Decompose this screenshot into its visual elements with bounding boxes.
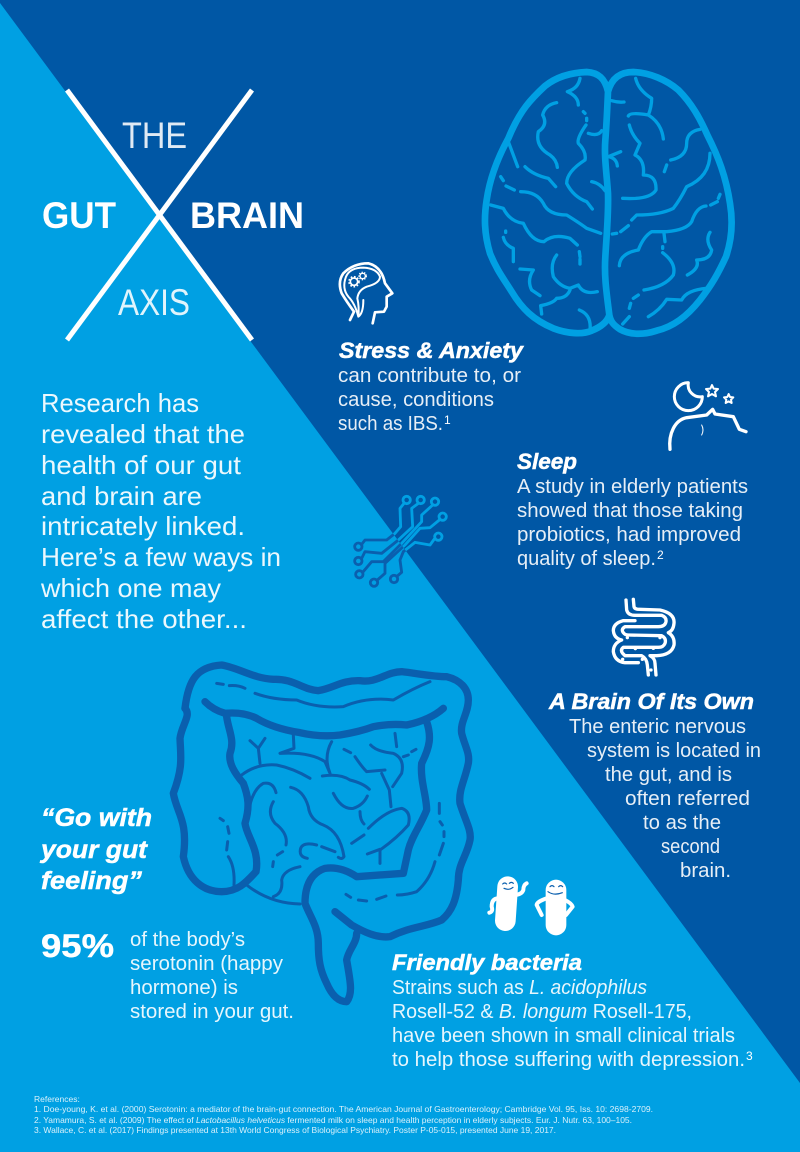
statistic: 95 percent serotonin: hormone) is xyxy=(130,977,238,999)
text block: friendly bacteria: Friendly bacteria xyxy=(392,950,582,975)
references: 1. Doe-young, K. et al. (2000) Serotonin: a mediator of the brain-gut connection. The American Journal of Gastroenterology; Cambridge Vol. 95, Iss. 10: 2698-2709. xyxy=(34,1104,653,1114)
text block: sleep: Sleep xyxy=(517,449,577,474)
text block: a brain of its own: to as the xyxy=(643,812,721,834)
quote: go with your gut feeling: your gut xyxy=(39,836,149,864)
text block: stress and anxiety: Stress & Anxiety xyxy=(339,338,525,363)
icon: head with gears xyxy=(340,263,392,323)
title: The Gut Brain Axis xyxy=(42,90,304,340)
intro paragraph xyxy=(40,388,281,634)
text block: a brain of its own: brain. xyxy=(680,860,731,882)
intro paragraph: affect the other... xyxy=(41,604,247,634)
text block: a brain of its own: often referred xyxy=(625,788,750,810)
title: The Gut Brain Axis: AXIS xyxy=(118,282,190,323)
intro paragraph: Here’s a few ways in xyxy=(41,542,281,572)
references: References: xyxy=(34,1094,80,1104)
intro paragraph: Research has xyxy=(41,388,199,418)
statistic: 95 percent serotonin xyxy=(41,928,294,1023)
statistic: 95 percent serotonin: serotonin (happy xyxy=(130,953,283,975)
text block: stress and anxiety: can contribute to, or xyxy=(338,365,521,387)
text block: sleep: quality of sleep. xyxy=(517,548,656,570)
intro paragraph: health of our gut xyxy=(41,450,242,480)
statistic: 95 percent serotonin: 95% xyxy=(41,928,114,964)
icon: sleeping head with moon and stars xyxy=(670,383,746,449)
text block: sleep: probiotics, had improved xyxy=(517,524,741,546)
text block: a brain of its own: the gut, and is xyxy=(605,764,732,786)
text block: a brain of its own: second xyxy=(661,836,720,858)
text block: a brain of its own: system is located in xyxy=(587,740,761,762)
references: 3. Wallace, C. et al. (2017) Findings presented at 13th World Congress of Biological Psychiatry. Poster P-05-015, presented June 19, 2017. xyxy=(34,1125,556,1135)
text block: sleep: showed that those taking xyxy=(517,500,743,522)
quote: go with your gut feeling xyxy=(39,804,152,895)
intro paragraph: and brain are xyxy=(41,481,202,511)
text block: friendly bacteria xyxy=(392,950,753,1071)
icon: friendly bacteria xyxy=(489,882,573,925)
text block: sleep: 2 xyxy=(657,548,664,562)
text block: a brain of its own: A Brain Of Its Own xyxy=(548,689,754,714)
statistic: 95 percent serotonin: stored in your gut. xyxy=(130,1001,294,1023)
icon: circuit connections xyxy=(355,496,446,586)
text block: friendly bacteria: have been shown in small clinical trials xyxy=(392,1025,735,1047)
text block: stress and anxiety: cause, conditions xyxy=(338,389,494,411)
title: The Gut Brain Axis: THE xyxy=(122,115,187,156)
title: The Gut Brain Axis: BRAIN xyxy=(190,195,304,236)
intro paragraph: intricately linked. xyxy=(41,511,245,541)
references: 2. Yamamura, S. et al. (2009) The effect of Lactobacillus helveticus fermented milk on sleep and health perception in elderly subjects. Eur. J. Nutr. 63, 100–105. xyxy=(34,1115,632,1125)
references xyxy=(34,1094,653,1135)
text block: sleep xyxy=(517,449,748,570)
intro paragraph: which one may xyxy=(40,573,221,603)
text block: stress and anxiety: 1 xyxy=(444,413,451,427)
text block: stress and anxiety: such as IBS. xyxy=(338,413,443,435)
icon: intestines xyxy=(613,599,674,675)
illustration: brain xyxy=(485,72,732,334)
text block: friendly bacteria: Strains such as L. acidophilus xyxy=(392,977,647,999)
text block: stress and anxiety xyxy=(338,338,525,435)
statistic: 95 percent serotonin: of the body’s xyxy=(130,929,245,951)
text block: friendly bacteria: Rosell-52 & B. longum Rosell-175, xyxy=(392,1001,692,1023)
text block: friendly bacteria: to help those suffering with depression. xyxy=(392,1049,745,1071)
intro paragraph: revealed that the xyxy=(41,419,245,449)
text block: friendly bacteria: 3 xyxy=(746,1049,753,1063)
text block: a brain of its own xyxy=(548,689,761,882)
quote: go with your gut feeling: feeling” xyxy=(41,867,143,895)
title: The Gut Brain Axis: GUT xyxy=(42,195,116,236)
text block: a brain of its own: The enteric nervous xyxy=(569,716,746,738)
illustration: intestines xyxy=(173,665,470,1002)
text block: sleep: A study in elderly patients xyxy=(517,476,748,498)
quote: go with your gut feeling: “Go with xyxy=(41,804,152,832)
